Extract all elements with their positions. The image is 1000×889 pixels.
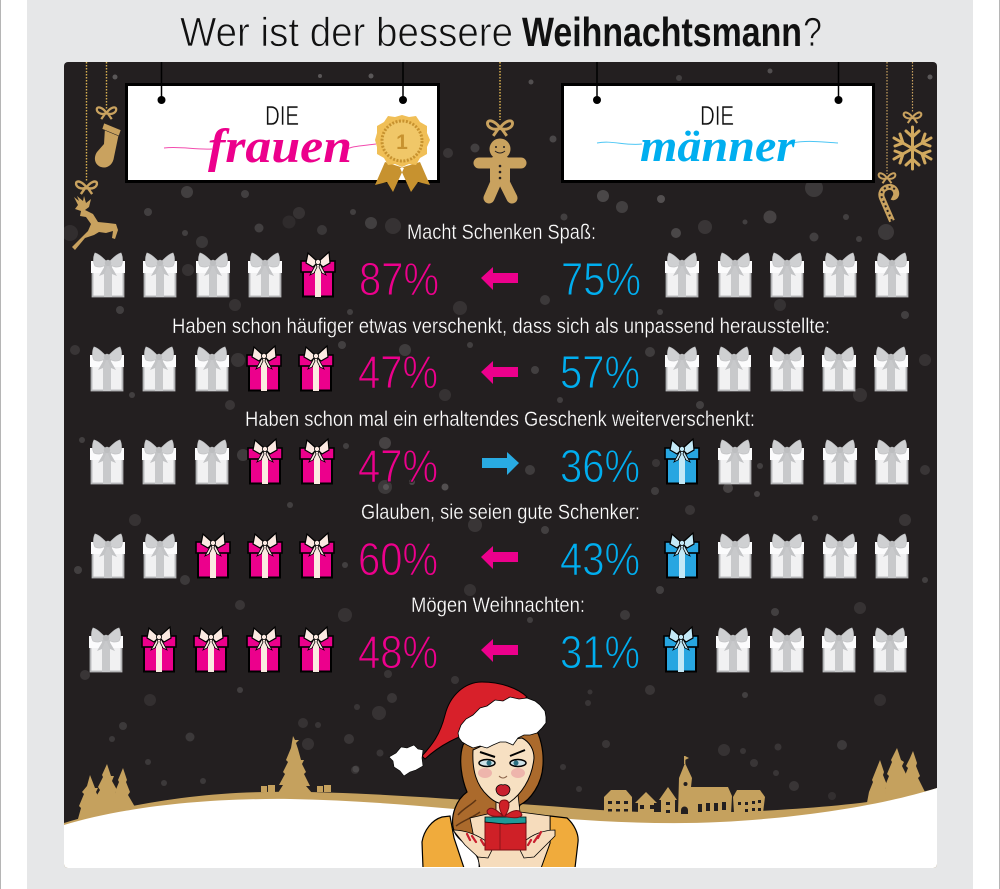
sign hangers [158,62,407,104]
title [180,9,822,55]
arrow [482,452,519,475]
arrow [481,546,518,569]
jacket [422,816,578,868]
nails [467,832,541,845]
script word: frauen [208,120,352,173]
scenery: village with church [600,756,770,816]
title: Weihnachtsmann [522,9,802,55]
hat fur [458,697,546,748]
sign text: DIE [265,100,299,131]
row 1 [91,221,909,305]
ornament: reindeer on dotted string [72,62,118,250]
chest and neck [470,795,550,868]
men value: 31% [560,626,640,678]
hair [453,728,543,868]
title: ? [803,9,822,55]
gold hill band [64,788,937,868]
santa hat [422,682,527,759]
arrow [481,639,518,662]
arrow [481,361,518,384]
title: Wer ist der bessere [180,9,513,55]
men gifts [665,347,908,391]
panel: dark night background [62,62,937,868]
white snow [64,788,937,868]
women gifts [91,533,334,578]
sign hangers [593,62,842,104]
swash [597,141,838,144]
women value: 87% [359,253,439,305]
question: Mögen Weihnachten: [411,594,585,617]
women value: 47% [358,440,438,492]
row 5 [89,594,907,678]
men gifts [665,253,909,297]
ornament: candy cane on dotted string [879,62,896,221]
sign text: DIE [700,100,734,131]
men value: 36% [560,440,640,492]
gift box [485,800,526,850]
row 3 [90,408,909,492]
men gifts [665,439,909,484]
question: Haben schon häufiger etwas verschenkt, dass sich als unpassend herausstellte: [172,315,830,338]
women gifts [90,346,333,391]
swash [164,144,376,150]
women value: 60% [358,533,438,585]
woman with santa hat holding a gift [389,682,578,868]
question: Haben schon mal ein erhaltendes Geschenk weiterverschenkt: [245,408,755,431]
ornament: gingerbread man on dotted string [479,62,521,198]
script word: männer [640,120,796,171]
face [473,738,534,804]
nose [499,776,507,778]
men gifts [664,627,907,672]
women value: 48% [358,626,438,678]
men value: 75% [561,253,641,305]
hands [453,830,555,858]
sign: die frauen [126,62,438,182]
arrow [481,267,518,290]
women gifts [90,439,334,484]
men value: 43% [560,533,640,585]
hat pompom [389,745,423,776]
women value: 47% [358,346,438,398]
question: Macht Schenken Spaß: [407,221,596,244]
women gifts [91,252,335,297]
scenery: left trees [78,764,134,819]
row 2 [90,315,908,398]
men value: 57% [560,346,640,398]
ornament: snowflake on dotted string [894,62,931,169]
medal: first place: 1 [396,131,408,154]
women gifts [89,627,333,672]
medal: first place [375,115,430,192]
scenery: central christmas tree with gifts [261,736,331,793]
cheeks [478,768,525,778]
scenery: right trees [867,748,925,802]
bokeh snow [62,68,932,800]
hair strands [456,800,480,826]
men gifts [665,533,909,578]
row 4 [91,501,909,585]
sign: die maenner [562,62,874,182]
question: Glauben, sie seien gute Schenker: [361,501,640,524]
lips [496,785,510,796]
ornament: stocking on dotted string [95,62,121,168]
eyes and brows [479,750,526,766]
